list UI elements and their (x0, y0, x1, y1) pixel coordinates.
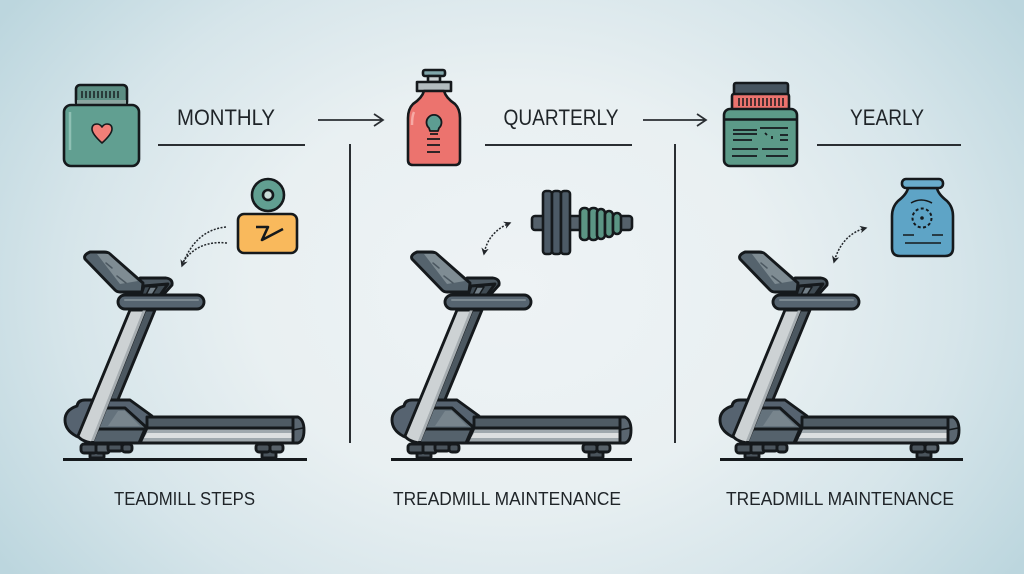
icon: blue jar (892, 179, 953, 256)
heading: quarterly: QUARTERLY (504, 105, 619, 130)
divider line 2 (674, 144, 676, 443)
arrow: monthly to quarterly (318, 114, 383, 126)
heading: monthly: MONTHLY (177, 105, 275, 130)
icon: dumbbell (532, 191, 632, 254)
caption: treadmill steps: TEADMILL STEPS (114, 489, 255, 509)
floor line 1 (63, 458, 307, 461)
caption: treadmill maintenance: TREADMILL MAINTENANCE (726, 489, 954, 509)
floor line 3 (720, 458, 963, 461)
underline: quarterly (485, 144, 632, 146)
arrow: dashed curve to treadmill (484, 223, 510, 254)
divider line 1 (349, 144, 351, 443)
arrow: quarterly to yearly (643, 114, 706, 126)
treadmill 1 (65, 252, 304, 458)
icon: red bottle (408, 70, 460, 165)
arrow: dashed curve to treadmill (834, 228, 866, 262)
icon: labelled green container (724, 83, 797, 166)
caption: treadmill maintenance: TREADMILL MAINTENANCE (393, 489, 621, 509)
floor line 2 (391, 458, 632, 461)
icon: green jar with heart (64, 85, 139, 166)
panel: yearly (720, 83, 963, 509)
heading: yearly: YEARLY (850, 105, 924, 130)
underline: monthly (158, 144, 305, 146)
treadmill 2 (392, 252, 631, 458)
panel: quarterly (391, 70, 632, 509)
arrow: dashed curves to treadmill (182, 227, 227, 266)
treadmill 3 (720, 252, 959, 458)
panel: monthly (63, 85, 307, 509)
icon: disc and gauge box (238, 179, 297, 253)
underline: yearly (817, 144, 961, 146)
